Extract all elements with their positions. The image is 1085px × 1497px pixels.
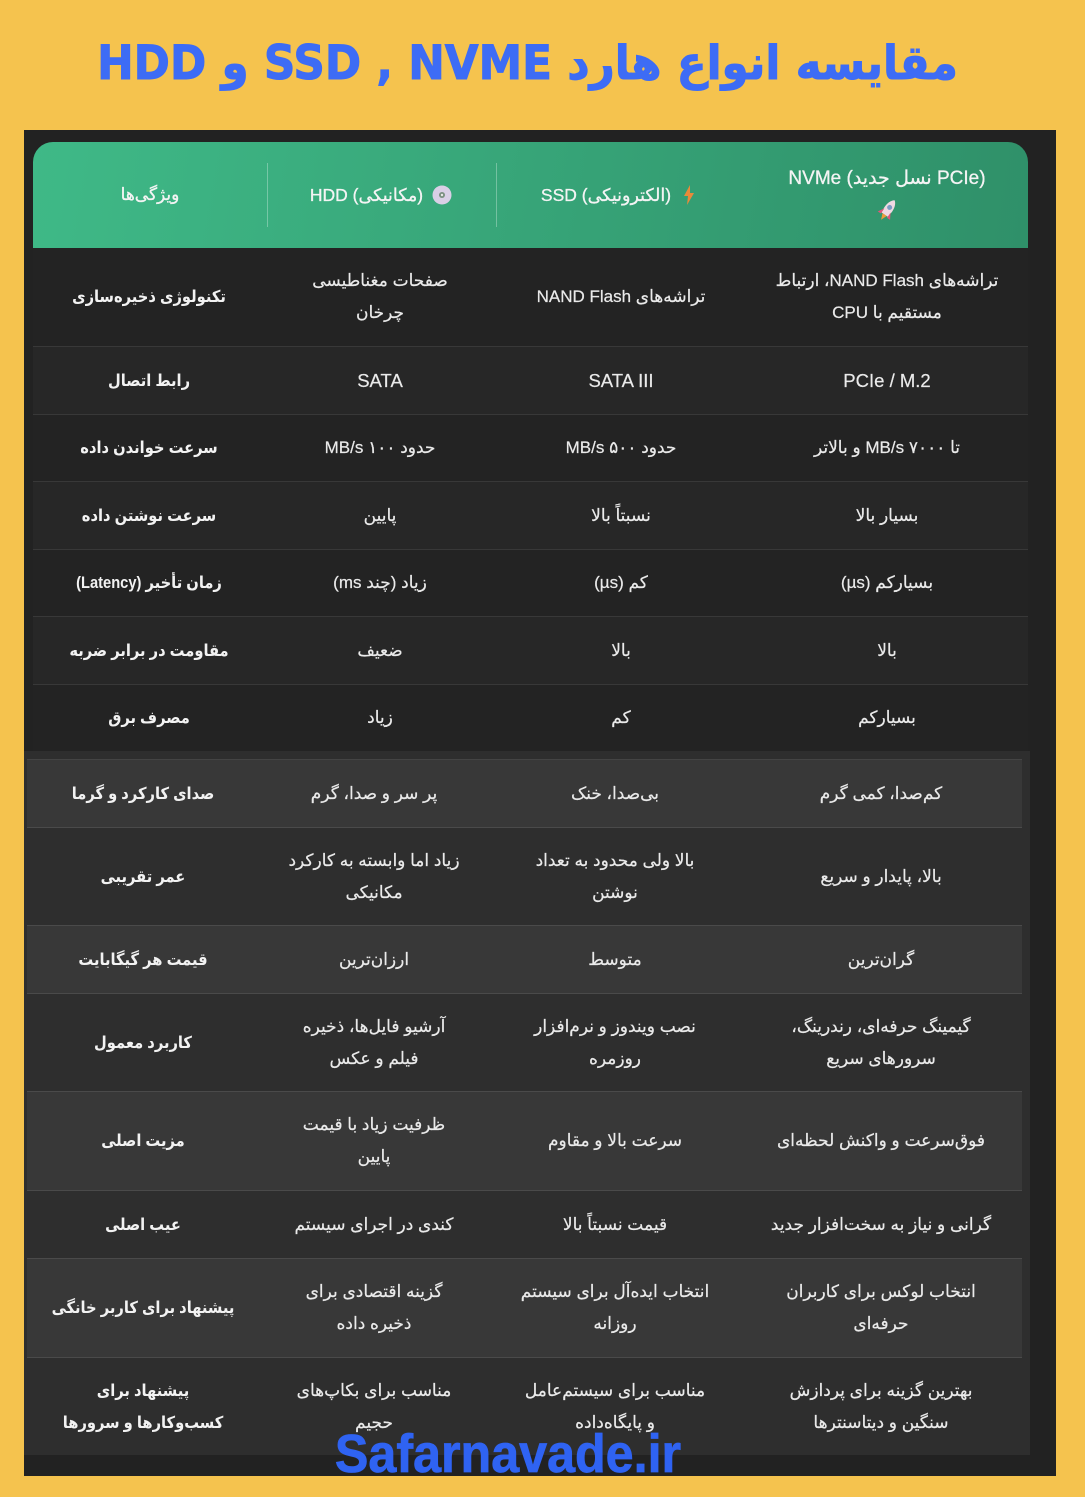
cell: ذخیره داده [336, 1314, 412, 1333]
cell: مقاومت در برابر ضربه [69, 642, 229, 660]
cell: فوق‌سرعت و واکنش لحظه‌ای [777, 1131, 985, 1150]
cell: روزمره [589, 1048, 641, 1068]
cell: کم‌صدا، کمی گرم [820, 784, 942, 802]
cell: حرفه‌ای [853, 1314, 909, 1333]
cell [303, 1115, 445, 1166]
cell: بسیارکم [858, 708, 916, 727]
cell: PCIe / M.2 [843, 370, 931, 390]
cell: نسبتاً بالا [591, 506, 651, 524]
row: lifespan [27, 828, 1022, 926]
cell: سرورهای سریع [826, 1048, 936, 1068]
cell: رابط اتصال [108, 372, 190, 390]
cell: آرشیو فایل‌ها، ذخیره [303, 1016, 445, 1036]
cell [525, 1380, 705, 1432]
cell: ضعیف [357, 640, 403, 660]
row: common use [27, 994, 1022, 1092]
cell: SATA III [588, 370, 654, 390]
cell: فیلم و عکس [329, 1048, 419, 1068]
cell: تراشه‌های NAND Flash، ارتباط [776, 271, 998, 290]
row: main drawback [27, 1191, 1022, 1259]
cell: چرخان [356, 303, 404, 322]
cell: پیشنهاد برای [97, 1382, 189, 1400]
cell: پیشنهاد برای کاربر خانگی [52, 1299, 234, 1317]
cell [306, 1282, 443, 1334]
cell: عیب اصلی [105, 1216, 181, 1234]
cell: سنگین و دیتاسنترها [813, 1412, 949, 1432]
cell: حدود ۱۰۰ MB/s [325, 438, 435, 457]
cell: پایین [358, 1147, 390, 1166]
cell: گیمینگ حرفه‌ای، رندرینگ، [791, 1016, 971, 1036]
cell [776, 271, 998, 322]
icon: rocket [878, 200, 896, 220]
row: main advantage [27, 1092, 1022, 1191]
header: features: ویژگی‌ها [121, 185, 179, 204]
cell: حدود ۵۰۰ MB/s [566, 438, 676, 457]
cell: تا ۷۰۰۰ MB/s و بالاتر [814, 438, 960, 457]
cell [521, 1280, 709, 1334]
cell: کندی در اجرای سیستم [294, 1214, 454, 1234]
cell: زیاد (چند ms) [333, 573, 427, 592]
cell [533, 1016, 696, 1068]
cell: زیاد اما وابسته به کارکرد [288, 850, 460, 870]
cell [790, 1380, 972, 1432]
cell [536, 850, 694, 902]
cell: ظرفیت زیاد با قیمت [303, 1115, 445, 1134]
panel: table header [33, 142, 1028, 248]
row: business recommendation [27, 1358, 1022, 1455]
cell: قیمت نسبتاً بالا [563, 1214, 667, 1234]
website brand: Safarnavade.ir [335, 1424, 681, 1484]
cell: مناسب برای بکاپ‌های [297, 1380, 451, 1400]
row: noise and heat [27, 759, 1022, 828]
header: SSD: (الکترونیکی) SSD [541, 185, 671, 205]
cell [297, 1380, 451, 1432]
cell: پایین [364, 506, 396, 524]
cell: تراشه‌های NAND Flash [537, 287, 705, 306]
row: write speed [33, 482, 1028, 550]
row: latency [33, 550, 1028, 617]
cell: مناسب برای سیستم‌عامل [525, 1380, 705, 1400]
cell: سرعت بالا و مقاوم [548, 1131, 682, 1150]
cell [786, 1282, 976, 1334]
cell: انتخاب لوکس برای کاربران [786, 1282, 976, 1301]
cell: و پایگاه‌داده [575, 1412, 655, 1432]
cell: بالا [611, 640, 631, 660]
row: interface [33, 347, 1028, 415]
cell: زیاد [367, 708, 393, 727]
cell [791, 1016, 971, 1068]
cell: بالا [877, 640, 897, 660]
cell: SATA [357, 370, 403, 390]
cell: نوشتن [592, 882, 638, 902]
panel: lower table background [24, 751, 1030, 1455]
cell [288, 850, 460, 902]
cell: روزانه [593, 1314, 637, 1333]
row: power usage [33, 685, 1028, 751]
cell: مستقیم با CPU [832, 303, 942, 322]
cell: سرعت نوشتن داده [82, 506, 216, 524]
header: NVMe [788, 168, 986, 220]
cell: بالا ولی محدود به تعداد [536, 850, 694, 870]
cell: مصرف برق [108, 709, 190, 727]
cell [63, 1382, 224, 1432]
cell: نصب ویندوز و نرم‌افزار [534, 1016, 696, 1036]
cell: بالا، پایدار و سریع [820, 866, 942, 886]
cell: حجیم [355, 1412, 393, 1432]
row: home user recommendation [27, 1259, 1022, 1358]
cell: مزیت اصلی [101, 1132, 185, 1150]
header: NVMe: (PCIe نسل جدید) NVMe [788, 168, 986, 189]
cell: گزینه اقتصادی برای [306, 1282, 442, 1301]
cell: متوسط [588, 950, 642, 968]
cell: بسیارکم (µs) [841, 573, 933, 592]
cell [303, 1016, 446, 1068]
cell: بهترین گزینه برای پردازش [790, 1380, 972, 1400]
row: read speed [33, 415, 1028, 482]
cell: پر سر و صدا، گرم [311, 784, 437, 802]
icon: lightning [684, 185, 694, 205]
cell [312, 271, 448, 322]
cell: گران‌ترین [848, 950, 914, 968]
cell: ارزان‌ترین [339, 950, 409, 968]
cell: تکنولوژی ذخیره‌سازی [72, 288, 226, 306]
cell: مکانیکی [345, 882, 403, 902]
cell: عمر تقریبی [101, 868, 185, 886]
header: HDD: (مکانیکی) HDD [310, 185, 423, 205]
cell: صفحات مغناطیسی [312, 271, 448, 290]
row: storage technology [33, 248, 1028, 347]
row: shock resistance [33, 617, 1028, 685]
cell: کم [611, 708, 631, 727]
row: price per gigabyte [27, 926, 1022, 994]
cell: گرانی و نیاز به سخت‌افزار جدید [771, 1214, 991, 1234]
icon: disc [432, 186, 452, 204]
cell: زمان تأخیر (Latency) [76, 574, 222, 592]
cell: انتخاب ایده‌آل برای سیستم [521, 1282, 709, 1301]
cell: کسب‌وکارها و سرورها [63, 1414, 223, 1432]
cell: سرعت خواندن داده [80, 439, 218, 457]
title: مقایسه انواع هارد NVME ‏,‏ SSD و HDD [97, 36, 958, 91]
cell: کم (µs) [594, 573, 648, 592]
cell: بی‌صدا، خنک [571, 784, 659, 802]
cell: صدای کارکرد و گرما [72, 784, 214, 802]
cell: بسیار بالا [856, 506, 918, 524]
cell: کاربرد معمول [94, 1034, 192, 1052]
cell: قیمت هر گیگابایت [78, 950, 208, 968]
